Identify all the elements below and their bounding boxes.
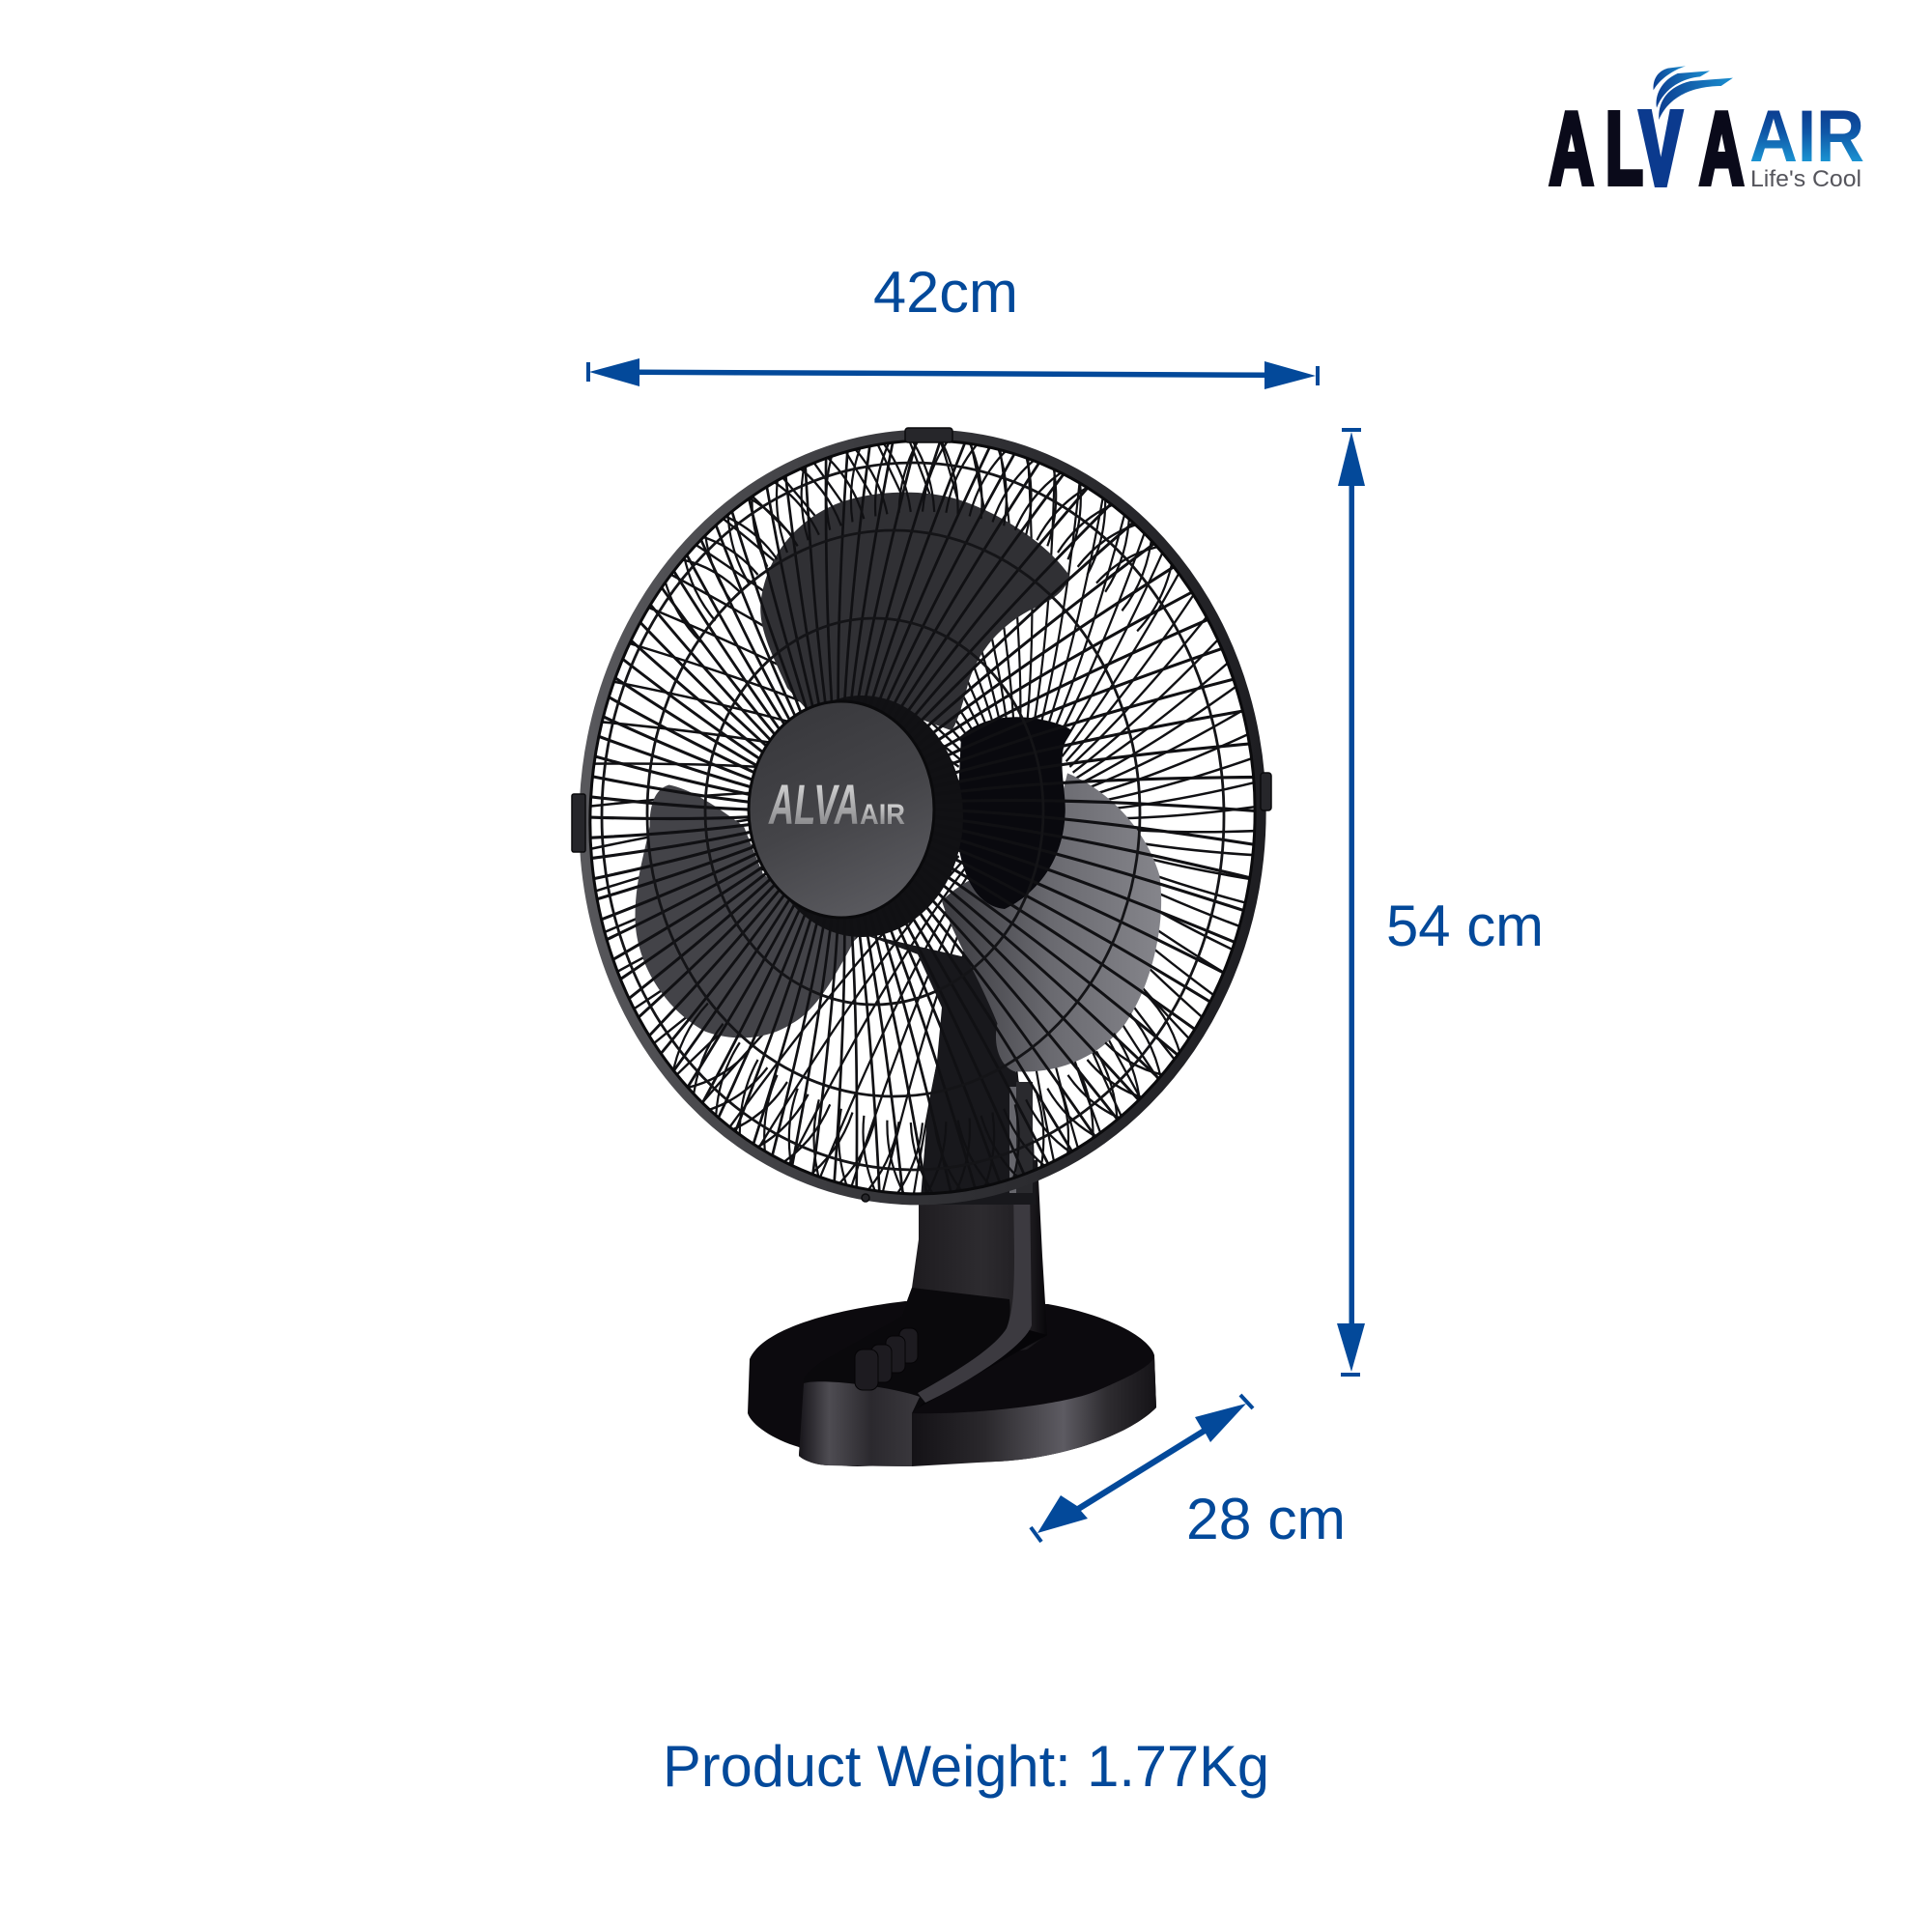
logo icon: swoosh feathers — [1654, 66, 1733, 120]
logo: Alva Air — [1549, 66, 1864, 206]
blade: top — [760, 493, 1070, 730]
control knobs — [855, 1328, 918, 1390]
height label: 54 cm — [1386, 894, 1544, 958]
fan base — [748, 1159, 1156, 1466]
neck — [901, 1159, 1047, 1352]
neck highlight band — [918, 1183, 1032, 1403]
rear grille wires — [591, 442, 1254, 1192]
pod front — [799, 1381, 920, 1466]
dark wedge under neck — [914, 1323, 1047, 1410]
control pod — [799, 1288, 1010, 1466]
stand pole behind grille — [860, 933, 1036, 1205]
blade: left — [636, 785, 865, 1037]
rim clips — [572, 428, 1271, 1202]
height arrow — [1337, 428, 1365, 1377]
depth label: 28 cm — [1186, 1487, 1346, 1551]
base rim — [912, 1357, 1156, 1466]
blades and motor, traced in zoom coordinates — [636, 493, 1161, 1205]
logo tagline: Life's Cool — [1750, 166, 1861, 192]
depth arrow — [1031, 1395, 1253, 1542]
hub logo small: AIR — [860, 799, 905, 831]
logo wordmark: ALVA: ALVA — [1549, 91, 1744, 206]
base disc — [748, 1301, 1156, 1466]
hub logo: ALVA — [768, 774, 860, 837]
dark collar around hub — [760, 696, 963, 937]
hub cap — [749, 701, 934, 918]
blade: right — [942, 773, 1161, 1071]
fan product illustration — [571, 427, 1272, 1466]
width arrow — [586, 358, 1320, 389]
motor housing — [956, 717, 1072, 909]
outer mesh arcs, top and bottom — [641, 403, 1204, 1232]
concentric grille rings — [602, 463, 1224, 1170]
product weight: Product Weight: 1.77Kg — [663, 1734, 1269, 1799]
outer rim — [565, 417, 1280, 1217]
width label: 42cm — [873, 260, 1018, 325]
front grille wires — [591, 442, 1254, 1192]
logo wordmark: AIR: AIR — [1749, 96, 1864, 178]
stand highlight behind grille — [1009, 1082, 1033, 1193]
